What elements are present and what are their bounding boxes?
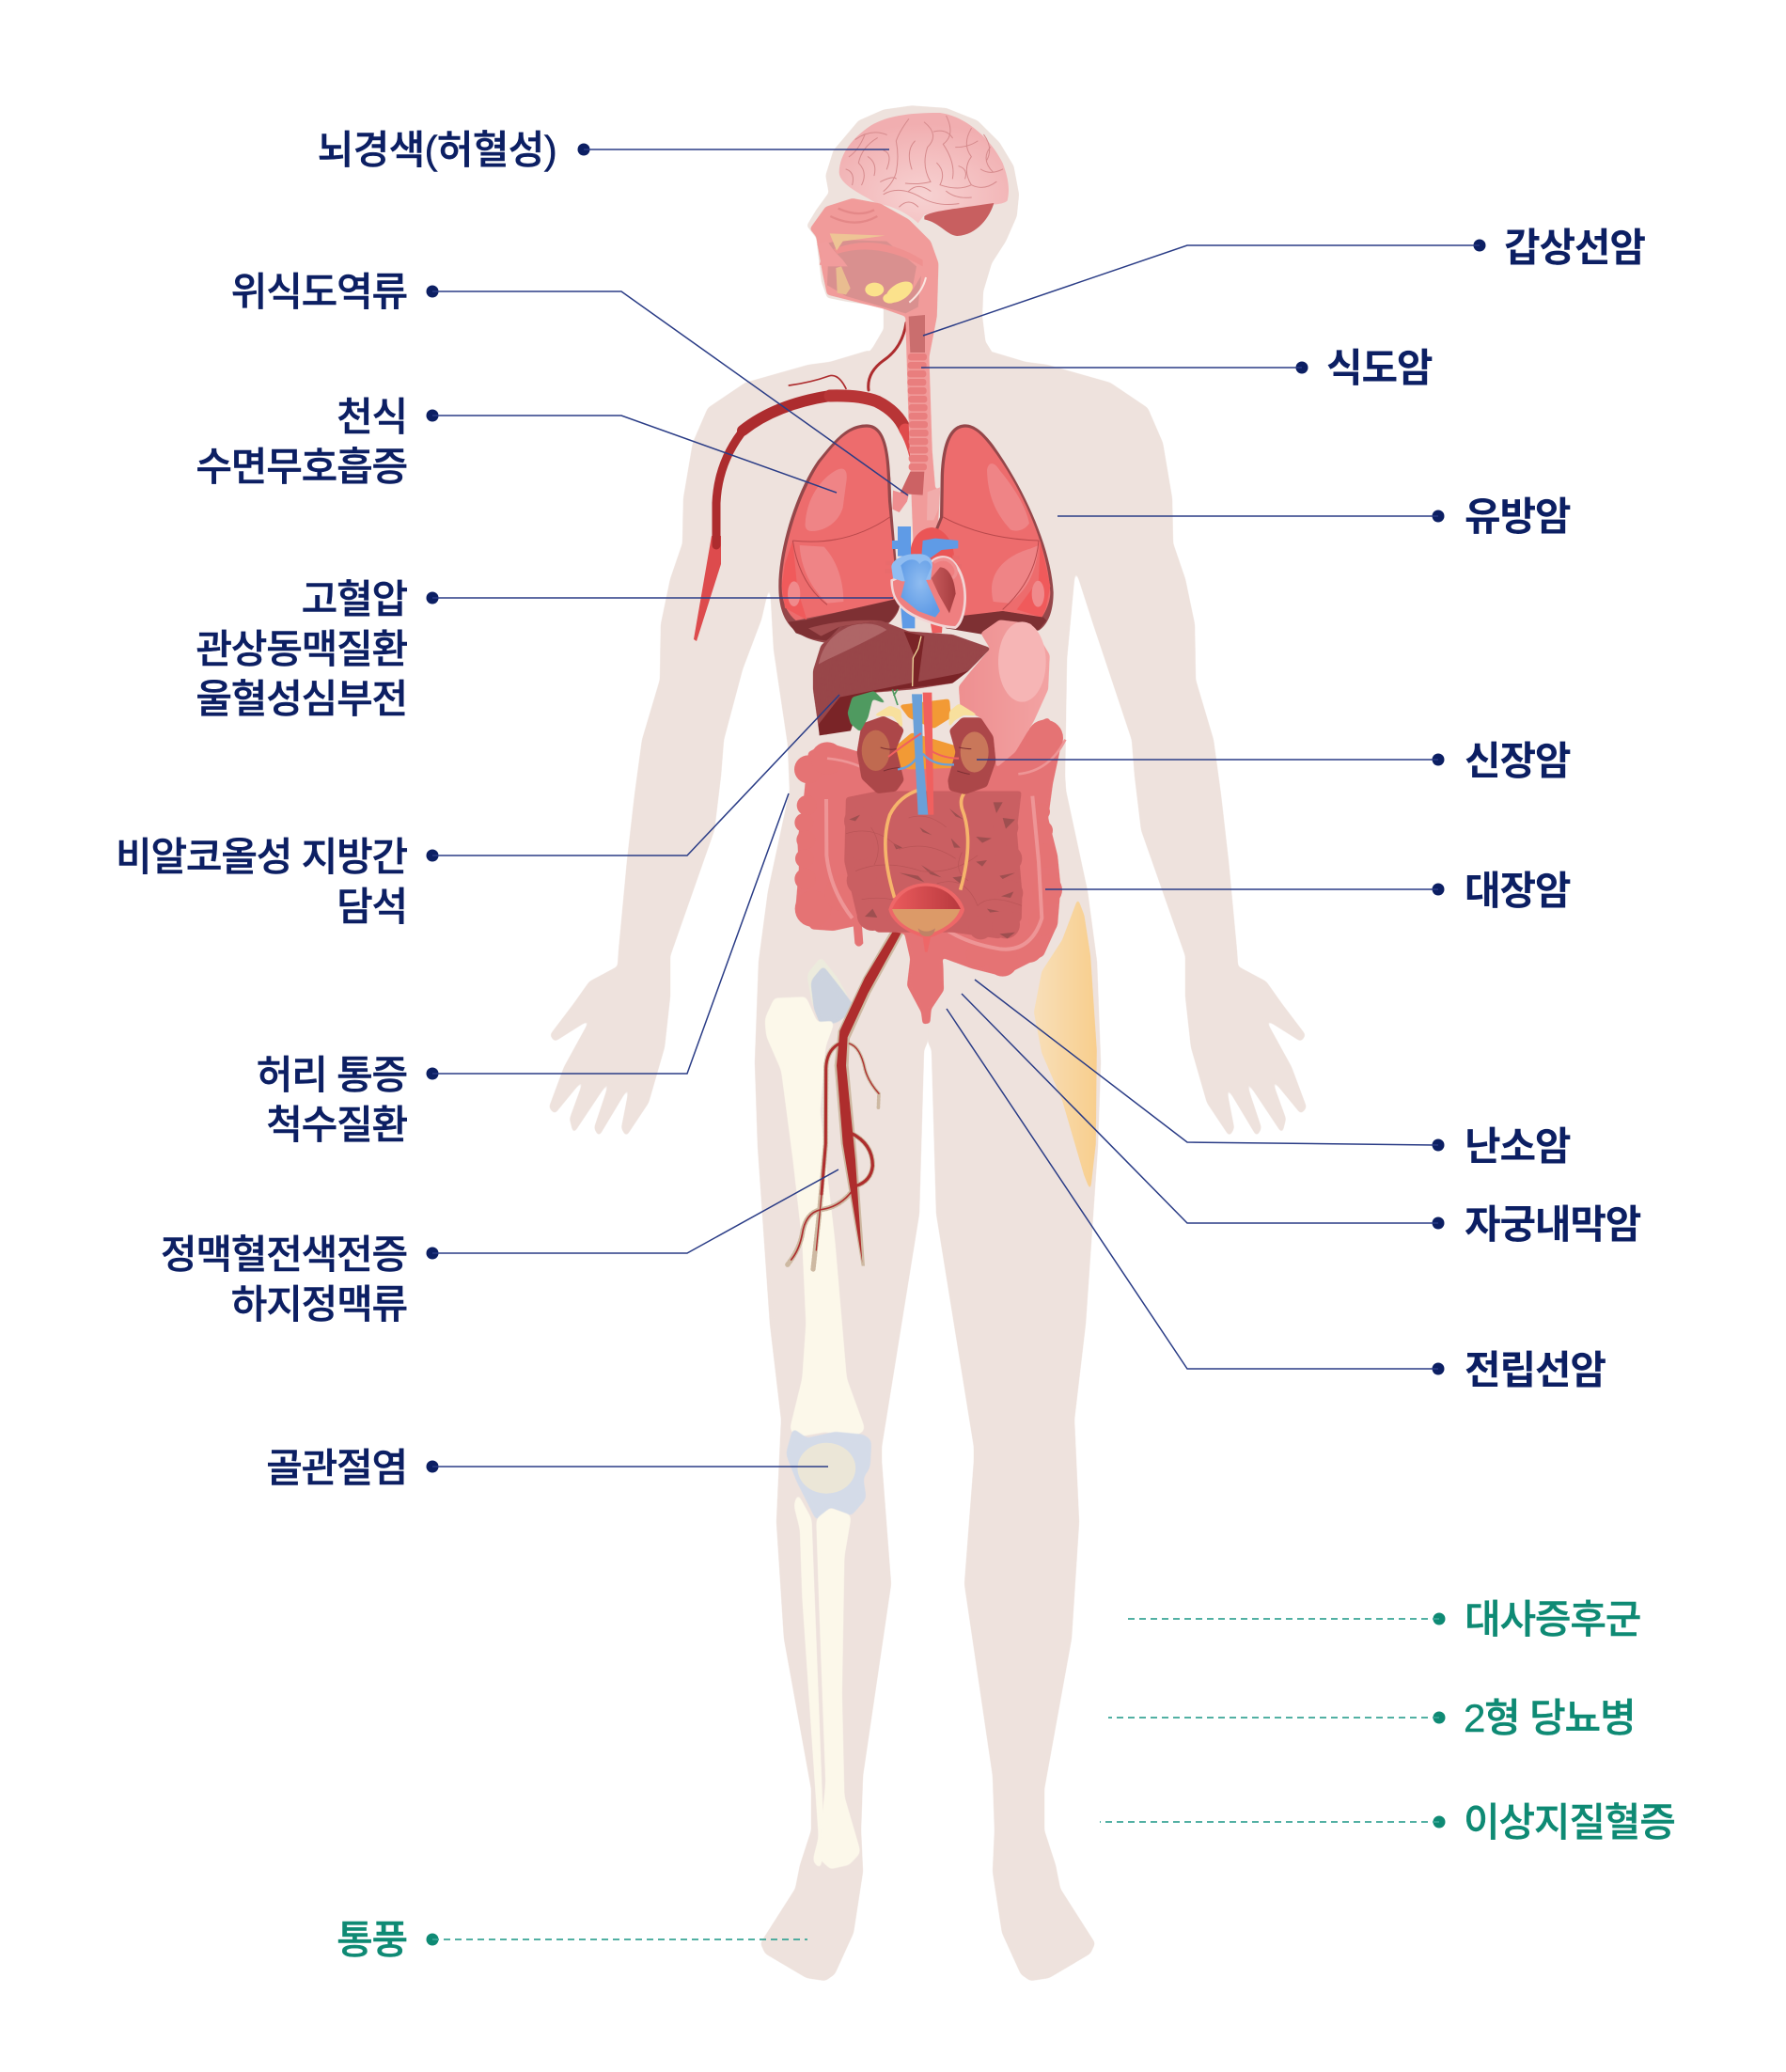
trachea rings — [907, 353, 929, 470]
label: 자궁내막암: 자궁내막암 — [1465, 1202, 1641, 1247]
label: 위식도역류 — [231, 270, 908, 495]
heart — [885, 526, 966, 633]
oesophagus, trachea and head organs — [810, 113, 1009, 545]
right lung — [919, 424, 1054, 635]
label: 자궁내막암 — [962, 994, 1641, 1247]
label: 고혈압, 관상동맥질환, 울혈성심부전: 울혈성심부전 — [196, 677, 407, 721]
gallbladder — [848, 691, 887, 731]
label: 이상지질혈증: 이상지질혈증 — [1464, 1800, 1675, 1844]
label: 비알코올성 지방간, 담석: 비알코올성 지방간 — [116, 835, 408, 879]
label: 전립선암 — [947, 1009, 1606, 1392]
arch branches — [789, 322, 906, 390]
aorta arch — [694, 322, 924, 641]
lungs — [778, 424, 1054, 643]
label: 통풍 — [337, 1918, 807, 1962]
bronchi — [900, 472, 924, 495]
label: 2형 당뇨병: 2형 당뇨병 — [1464, 1696, 1635, 1740]
label: 통풍: 통풍 — [337, 1918, 407, 1962]
bladder — [888, 883, 964, 952]
pharynx and oesophagus — [810, 198, 940, 545]
glands — [865, 277, 916, 306]
label: 고혈압, 관상동맥질환, 울혈성심부전: 관상동맥질환 — [196, 627, 408, 671]
brain — [839, 113, 1009, 223]
label: 신장암 — [977, 739, 1571, 783]
label: 허리 통증, 척수질환: 척수질환 — [266, 1103, 408, 1147]
label: 비알코올성 지방간, 담석 — [116, 695, 839, 929]
small intestine — [844, 792, 1023, 939]
liver — [813, 620, 991, 735]
label: 식도암 — [921, 346, 1433, 390]
label: 유방암 — [1058, 494, 1571, 539]
label: 비알코올성 지방간, 담석: 담석 — [337, 885, 407, 929]
label: 난소암 — [975, 980, 1571, 1169]
hip joint — [807, 957, 856, 1026]
label: 뇌경색: 뇌경색(허혈성) — [318, 128, 556, 172]
label: 고혈압, 관상동맥질환, 울혈성심부전 — [196, 577, 893, 721]
label: 정맥혈전색전증, 하지정맥류: 정맥혈전색전증 — [161, 1232, 407, 1277]
cerebellum — [924, 203, 994, 236]
label: 뇌경색 — [318, 128, 889, 172]
label: 대장암: 대장암 — [1465, 869, 1571, 913]
leg bones — [765, 957, 871, 1869]
tibia and fibula — [794, 1494, 861, 1869]
label: 신장암: 신장암 — [1465, 739, 1571, 783]
label: 식도암: 식도암 — [1326, 346, 1433, 390]
label: 2형 당뇨병 — [1108, 1696, 1635, 1740]
knee — [786, 1428, 871, 1520]
ureters — [885, 790, 968, 898]
colon — [794, 717, 1065, 1024]
label: 골관절염 — [266, 1446, 828, 1490]
label: 이상지질혈증 — [1100, 1800, 1675, 1844]
femur — [765, 997, 866, 1436]
label: 난소암: 난소암 — [1465, 1124, 1571, 1169]
label: 갑상선암 — [923, 226, 1645, 336]
colon scallops — [794, 720, 1063, 977]
label: 위식도역류: 위식도역류 — [231, 270, 407, 314]
label: 대사증후군 — [1126, 1597, 1640, 1641]
label: 정맥혈전색전증, 하지정맥류: 하지정맥류 — [231, 1282, 407, 1326]
label: 허리 통증, 척수질환 — [257, 793, 789, 1147]
left lung — [778, 424, 900, 643]
label: 골관절염: 골관절염 — [266, 1446, 407, 1490]
intestine loops edge — [844, 807, 1023, 939]
label: 전립선암: 전립선암 — [1465, 1348, 1606, 1392]
label: 대사증후군: 대사증후군 — [1465, 1597, 1640, 1641]
label: 허리 통증, 척수질환: 허리 통증 — [257, 1053, 407, 1097]
stomach — [959, 620, 1050, 768]
brain folds — [846, 116, 1003, 207]
nasal turbinates — [830, 209, 877, 223]
label: 정맥혈전색전증, 하지정맥류 — [161, 1169, 838, 1326]
leg arteries — [787, 926, 905, 1269]
label: 대장암 — [1045, 869, 1571, 913]
label: 천식, 수면무호흡증: 천식 — [337, 395, 407, 439]
pancreas, duodenum and great vessels — [896, 693, 957, 815]
label: 유방암: 유방암 — [1465, 494, 1571, 539]
label: 갑상선암: 갑상선암 — [1504, 226, 1645, 270]
kidneys — [857, 703, 995, 794]
label: 천식, 수면무호흡증: 수면무호흡증 — [196, 445, 407, 489]
label: 고혈압, 관상동맥질환, 울혈성심부전: 고혈압 — [302, 577, 408, 621]
thigh fat — [1034, 899, 1097, 1191]
body silhouette — [549, 105, 1307, 1981]
label: 천식, 수면무호흡증 — [196, 395, 837, 493]
